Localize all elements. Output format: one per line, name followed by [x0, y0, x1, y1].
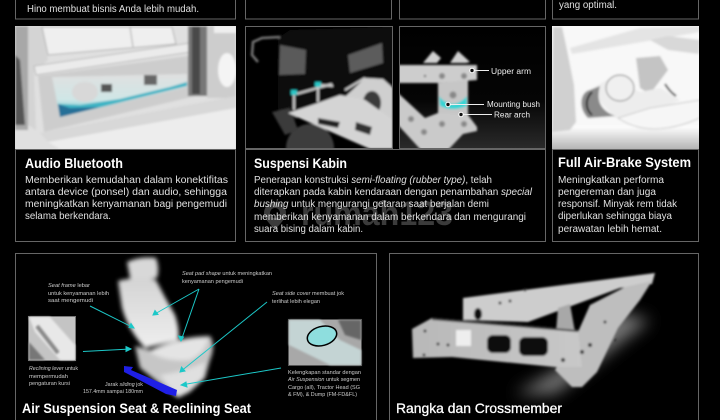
- text: seat frame note: untuk kenyamanan lebih: [48, 291, 109, 297]
- text: air suspension note: Cargo (all), Tractor Head (SG: [288, 385, 360, 391]
- panel: audio bluetooth: [10, 20, 240, 242]
- text: reclining lever note: mempermudah: [29, 374, 68, 380]
- text: seat pad note: Seat pad shape untuk meningkatkan: [182, 271, 272, 277]
- text: air suspension note: Kelengkapan standar dengan: [288, 370, 361, 376]
- text: air brake description: perawatan lebih hemat.: [558, 224, 662, 235]
- callout: rear arch: [459, 110, 530, 120]
- text box: suspensi: [246, 150, 546, 242]
- watermark: rumah123: rumah123: [301, 195, 453, 233]
- text: seat side cover note: Seat side cover membuat jok: [272, 291, 344, 297]
- text: reclining lever note: Reclining lever untuk: [29, 366, 78, 372]
- arrows: cyan leader lines: [83, 289, 281, 387]
- heading: audio bluetooth: Audio Bluetooth: [25, 155, 123, 171]
- text: seat side cover note: terlihat lebih elegan: [272, 299, 320, 305]
- panel: full air-brake system: [548, 22, 703, 242]
- text: air brake description: Meningkatkan performa: [558, 175, 664, 186]
- text: audio description: [25, 175, 228, 222]
- callout: mounting bush: Mounting bush: [487, 100, 540, 109]
- text: sliding note: [83, 382, 143, 395]
- text: sliding note: 157.4mm sampai 180mm: [83, 389, 143, 395]
- arrow: sliding range: [124, 366, 177, 396]
- text: audio description: Memberikan kemudahan dalam konektifitas: [25, 175, 228, 186]
- callout: rear arch: Rear arch: [494, 110, 530, 120]
- text: audio description: antara device (ponsel) dan audio, sehingga: [25, 187, 227, 198]
- text box: audio: [16, 150, 236, 242]
- panel: top left description: [16, 0, 236, 19]
- text: air brake description: pengereman dan juga: [558, 187, 656, 198]
- image: seat: [118, 258, 213, 398]
- image: cab mount diagram: [398, 26, 546, 150]
- text: seat pad note: kenyamanan pengemudi: [182, 279, 243, 285]
- text: air suspension note: Air Suspension untuk segmen: [287, 377, 360, 383]
- icon: location pin: [264, 202, 286, 229]
- callout: upper arm: Upper arm: [491, 67, 531, 76]
- inset: reclining lever: [28, 316, 76, 360]
- image: air brake chamber: [552, 26, 699, 149]
- text: seat frame note: saat mengemudi: [48, 298, 93, 304]
- text: suspensi description: memberikan kenyamanan dalam berkendara dan mengurangi: [254, 212, 526, 223]
- text: suspensi description: Penerapan konstruksi semi-floating (rubber type), telah: [254, 175, 492, 186]
- text: air brake description: [558, 175, 678, 235]
- image: chassis frame: [412, 273, 655, 394]
- panel: top middle right: [400, 0, 546, 19]
- panel: rangka dan crossmember: [390, 254, 698, 420]
- image: truck cab suspension: [245, 26, 393, 149]
- text: suspensi description: suara bising dalam kabin.: [254, 224, 363, 235]
- text: audio description: selama berkendara.: [25, 211, 111, 222]
- text: air brake description: diperlukan sehingga biaya: [558, 211, 672, 222]
- text: suspensi description: bushing untuk mengurangi getaran saat berjalan demi: [254, 199, 489, 210]
- text: seat pad note: [182, 271, 272, 285]
- text: seat frame note: Seat frame lebar: [48, 283, 90, 289]
- text: top left description: Hino membuat bisnis Anda lebih mudah.: [27, 4, 199, 15]
- text: sliding note: Jarak sliding jok: [105, 382, 143, 388]
- text: reclining lever note: pengaturan kursi: [29, 381, 70, 387]
- text: seat frame note: [48, 283, 109, 304]
- text: suspensi description: diterapkan pada kabin kendaraan dengan penambahan special: [254, 187, 533, 198]
- text: audio description: meningkatkan kenyamanan bagi pengemudi: [25, 199, 227, 210]
- heading: full air-brake system: Full Air-Brake System: [558, 154, 691, 170]
- text: air suspension note: [287, 370, 361, 398]
- panel: air suspension seat: [16, 254, 376, 420]
- image: dashboard radio: [15, 26, 236, 149]
- text: air suspension note: & FM), & Dump (FM-FD&FL): [288, 392, 357, 398]
- text: top right description: yang optimal.: [559, 0, 617, 11]
- panel: top middle: [246, 0, 392, 19]
- heading: air suspension seat: Air Suspension Seat & Reclining Seat: [22, 400, 251, 416]
- callout: upper arm: [470, 67, 531, 76]
- panel: top right description: [552, 0, 698, 19]
- text: air brake description: responsif. Minyak rem tidak: [558, 199, 678, 210]
- text box: air brake: [552, 150, 698, 242]
- callout: mounting bush: [446, 100, 540, 109]
- heading: suspensi kabin: Suspensi Kabin: [254, 155, 347, 171]
- inset: air suspension: [288, 320, 362, 366]
- panel: suspensi kabin: [246, 26, 546, 242]
- text: seat side cover note: [272, 291, 344, 305]
- text: suspensi description: [254, 175, 533, 235]
- text: reclining lever note: [29, 366, 78, 387]
- heading: rangka dan crossmember: Rangka dan Crossmember: [396, 400, 562, 416]
